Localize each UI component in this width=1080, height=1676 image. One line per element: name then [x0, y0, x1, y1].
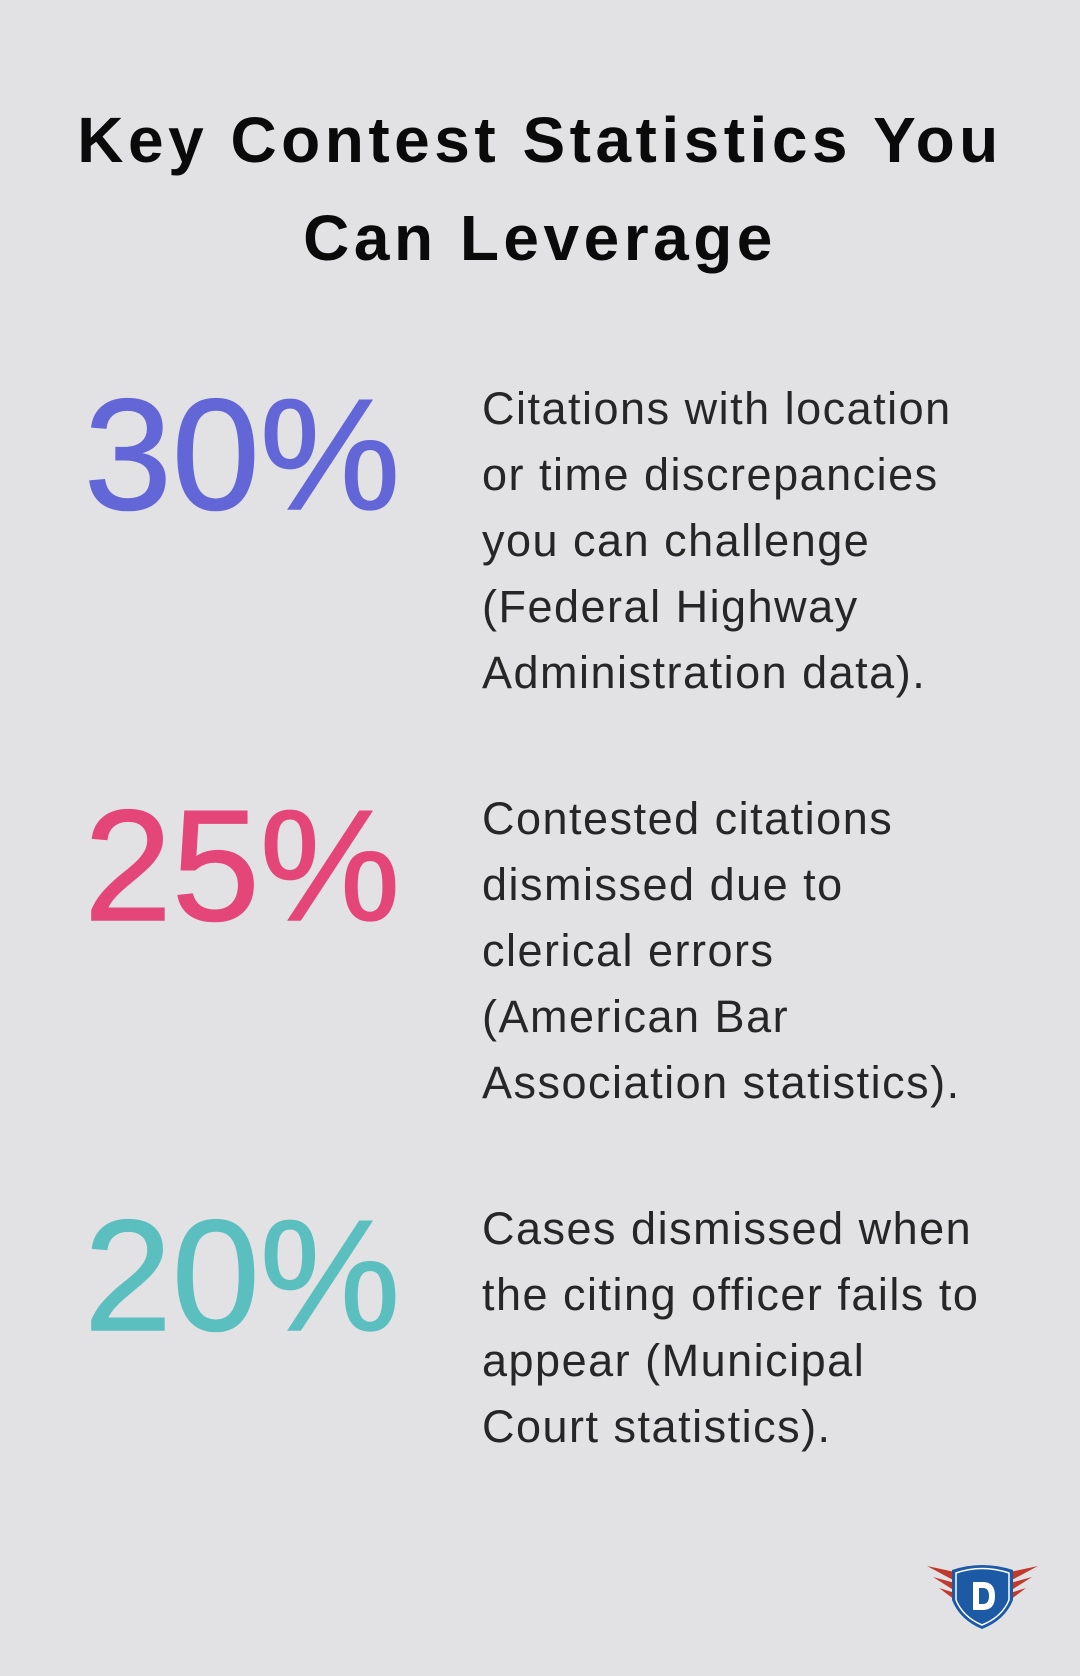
stat 3 number: 20% — [84, 1188, 400, 1364]
stat 2 description: Contested citations — [482, 793, 893, 844]
stat 1 description — [482, 383, 952, 698]
stat 3 description: the citing officer fails to — [482, 1269, 979, 1320]
stat 3 description: Cases dismissed when — [482, 1203, 972, 1254]
icon: shield logo — [927, 1565, 1038, 1629]
stat 2 description: clerical errors — [482, 925, 775, 976]
stat 1 description: Administration data). — [482, 647, 926, 698]
stat 2 description: (American Bar — [482, 991, 789, 1042]
title — [77, 104, 1003, 274]
title: Key Contest Statistics You — [77, 104, 1003, 176]
stat 3 description: appear (Municipal — [482, 1335, 865, 1386]
stat 2 description: dismissed due to — [482, 859, 844, 910]
title: Can Leverage — [303, 202, 777, 274]
stat 1 number: 30% — [84, 367, 400, 543]
stat 1 description: Citations with location — [482, 383, 952, 434]
stat 1 description: or time discrepancies — [482, 449, 939, 500]
stat 3 description — [482, 1203, 979, 1452]
stat 3 description: Court statistics). — [482, 1401, 832, 1452]
stat 2 number: 25% — [84, 778, 400, 954]
stat 1 description: you can challenge — [482, 515, 870, 566]
stat 1 description: (Federal Highway — [482, 581, 859, 632]
stat 2 description — [482, 793, 961, 1108]
stat 2 description: Association statistics). — [482, 1057, 961, 1108]
